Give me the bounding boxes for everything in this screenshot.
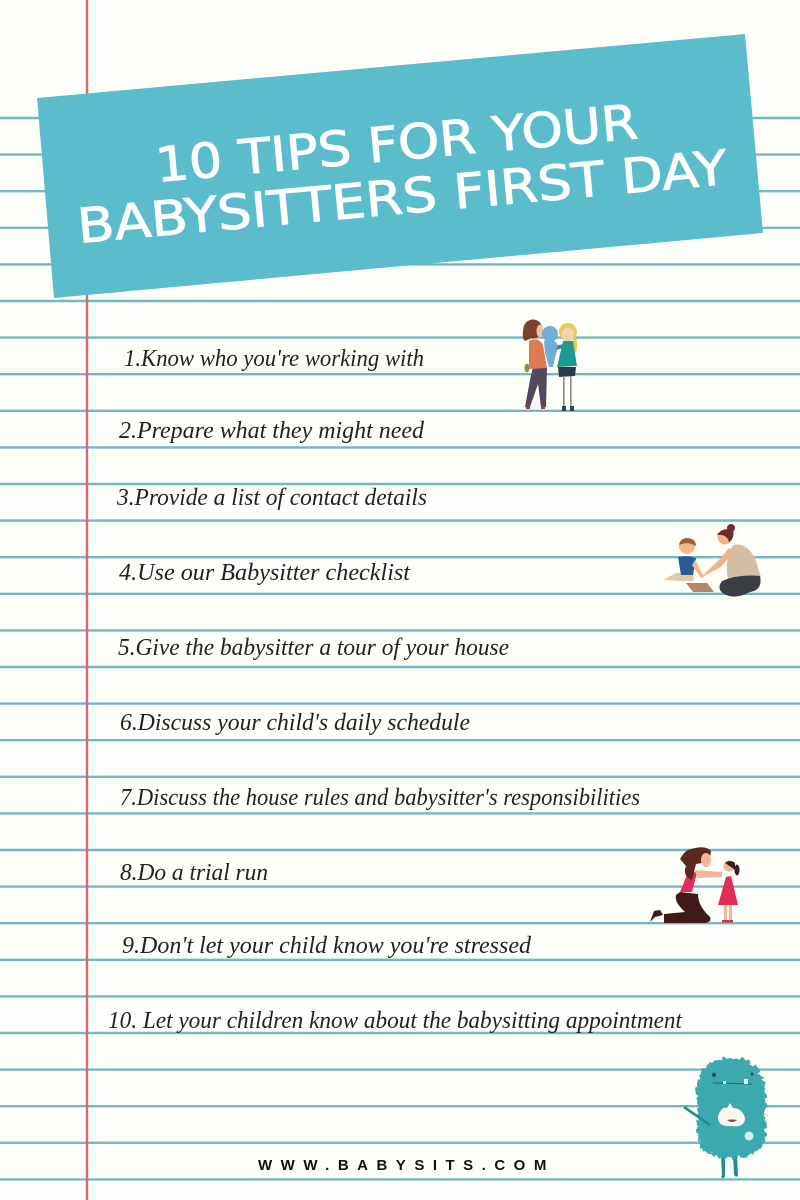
title line 2: BABYSITTERS FIRST DAY — [75, 140, 730, 255]
tip 6: 6.Discuss your child's daily schedule — [120, 710, 470, 736]
icon: woman playing with boy — [663, 524, 761, 597]
tip 9: 9.Don't let your child know you're stressed — [122, 933, 532, 959]
tip 4: 4.Use our Babysitter checklist — [119, 560, 411, 586]
icon: woman kneeling with little girl — [650, 847, 740, 923]
tips list — [108, 346, 683, 1034]
tip 1: 1.Know who you're working with — [124, 346, 424, 372]
tip 8: 8.Do a trial run — [120, 860, 268, 886]
icon: woman with baby and girl — [523, 320, 577, 411]
tip 7: 7.Discuss the house rules and babysitter's responsibilities — [120, 785, 640, 811]
website footer: WWW.BABYSITS.COM — [258, 1157, 555, 1174]
title banner — [37, 34, 763, 298]
icon: teal furry monster mascot — [684, 1058, 766, 1178]
tip 2: 2.Prepare what they might need — [119, 418, 425, 444]
tip 3: 3.Provide a list of contact details — [116, 485, 427, 511]
tip 5: 5.Give the babysitter a tour of your house — [118, 635, 509, 661]
title line 1: 10 TIPS FOR YOUR — [153, 94, 640, 194]
tip 10: 10. Let your children know about the babysitting appointment — [108, 1008, 683, 1034]
